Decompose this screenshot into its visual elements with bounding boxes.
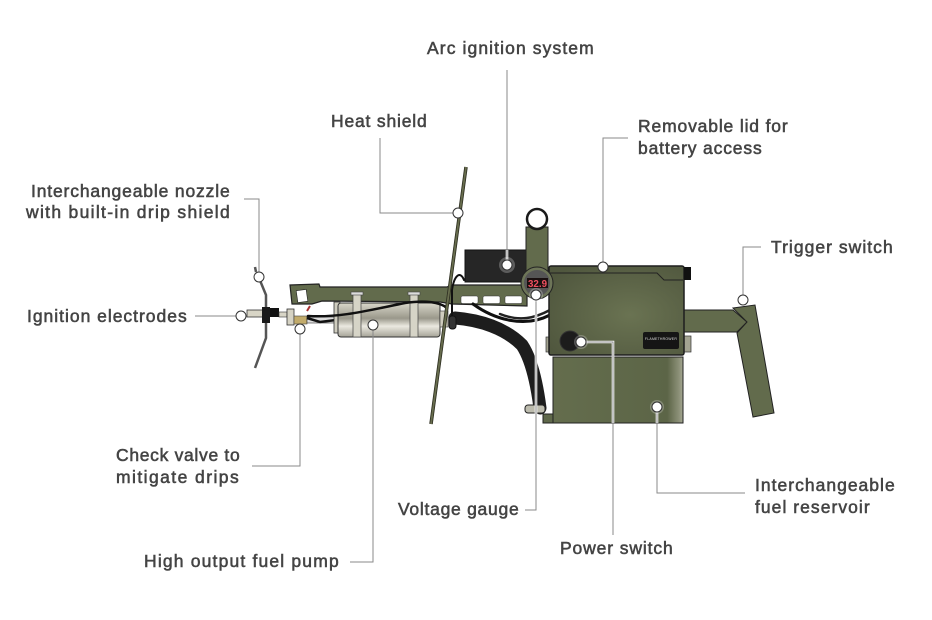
label: voltage gauge: Voltage gauge: [398, 499, 519, 519]
leader: nozzle: [244, 199, 259, 277]
leader: arc ignition: [506, 70, 508, 265]
leader: reservoir: [657, 407, 745, 493]
frame rail: [290, 284, 527, 306]
label: fuel reservoir: fuel reservoir: [755, 497, 870, 517]
leader: fuel pump: [350, 325, 373, 562]
label: fuel pump: High output fuel pump: [144, 551, 339, 571]
heat shield: [431, 167, 466, 424]
label: check valve: Check valve to: [116, 445, 240, 465]
leader: heat shield: [380, 138, 458, 213]
leader: removable lid: [603, 138, 628, 267]
wiring and fuel hoses: [308, 275, 550, 408]
label: power switch: Power switch: [560, 538, 673, 558]
check valve: [287, 306, 336, 325]
ignition electrodes and nozzle: [247, 307, 287, 323]
voltage gauge: [521, 267, 553, 299]
label: trigger switch: Trigger switch: [771, 237, 893, 257]
voltage gauge: 32.9: [528, 279, 547, 290]
fuel reservoir: [553, 357, 683, 423]
label: removable lid: battery access: [638, 138, 762, 158]
device illustration: [247, 167, 774, 424]
leader: voltage gauge: [525, 295, 536, 510]
rear grip: [684, 305, 774, 417]
label: nozzle: with built-in drip shield: [25, 202, 230, 222]
nozzle drip shield: [255, 267, 266, 368]
hose clamp: [525, 405, 554, 423]
main control box: FLAMETHROWER: [645, 337, 677, 341]
leader: electrodes: [195, 315, 241, 317]
arc ignition box: [465, 250, 527, 282]
fuel pump: [334, 292, 448, 337]
handle arm with ring: [526, 209, 548, 287]
leader: check valve: [252, 329, 300, 466]
label: check valve: mitigate drips: [116, 467, 239, 487]
label: fuel reservoir: Interchangeable: [755, 475, 895, 495]
callout markers: [236, 208, 748, 414]
leader: power switch: [581, 342, 613, 535]
label: heat shield: Heat shield: [331, 111, 427, 131]
main control box: [549, 266, 691, 355]
label: nozzle: Interchangeable nozzle: [31, 181, 230, 201]
bolts: [546, 336, 691, 352]
leader: trigger: [743, 247, 761, 300]
label: removable lid: Removable lid for: [638, 116, 788, 136]
label: arc ignition system: Arc ignition system: [427, 38, 594, 58]
label: ignition electrodes: Ignition electrodes: [27, 306, 187, 326]
